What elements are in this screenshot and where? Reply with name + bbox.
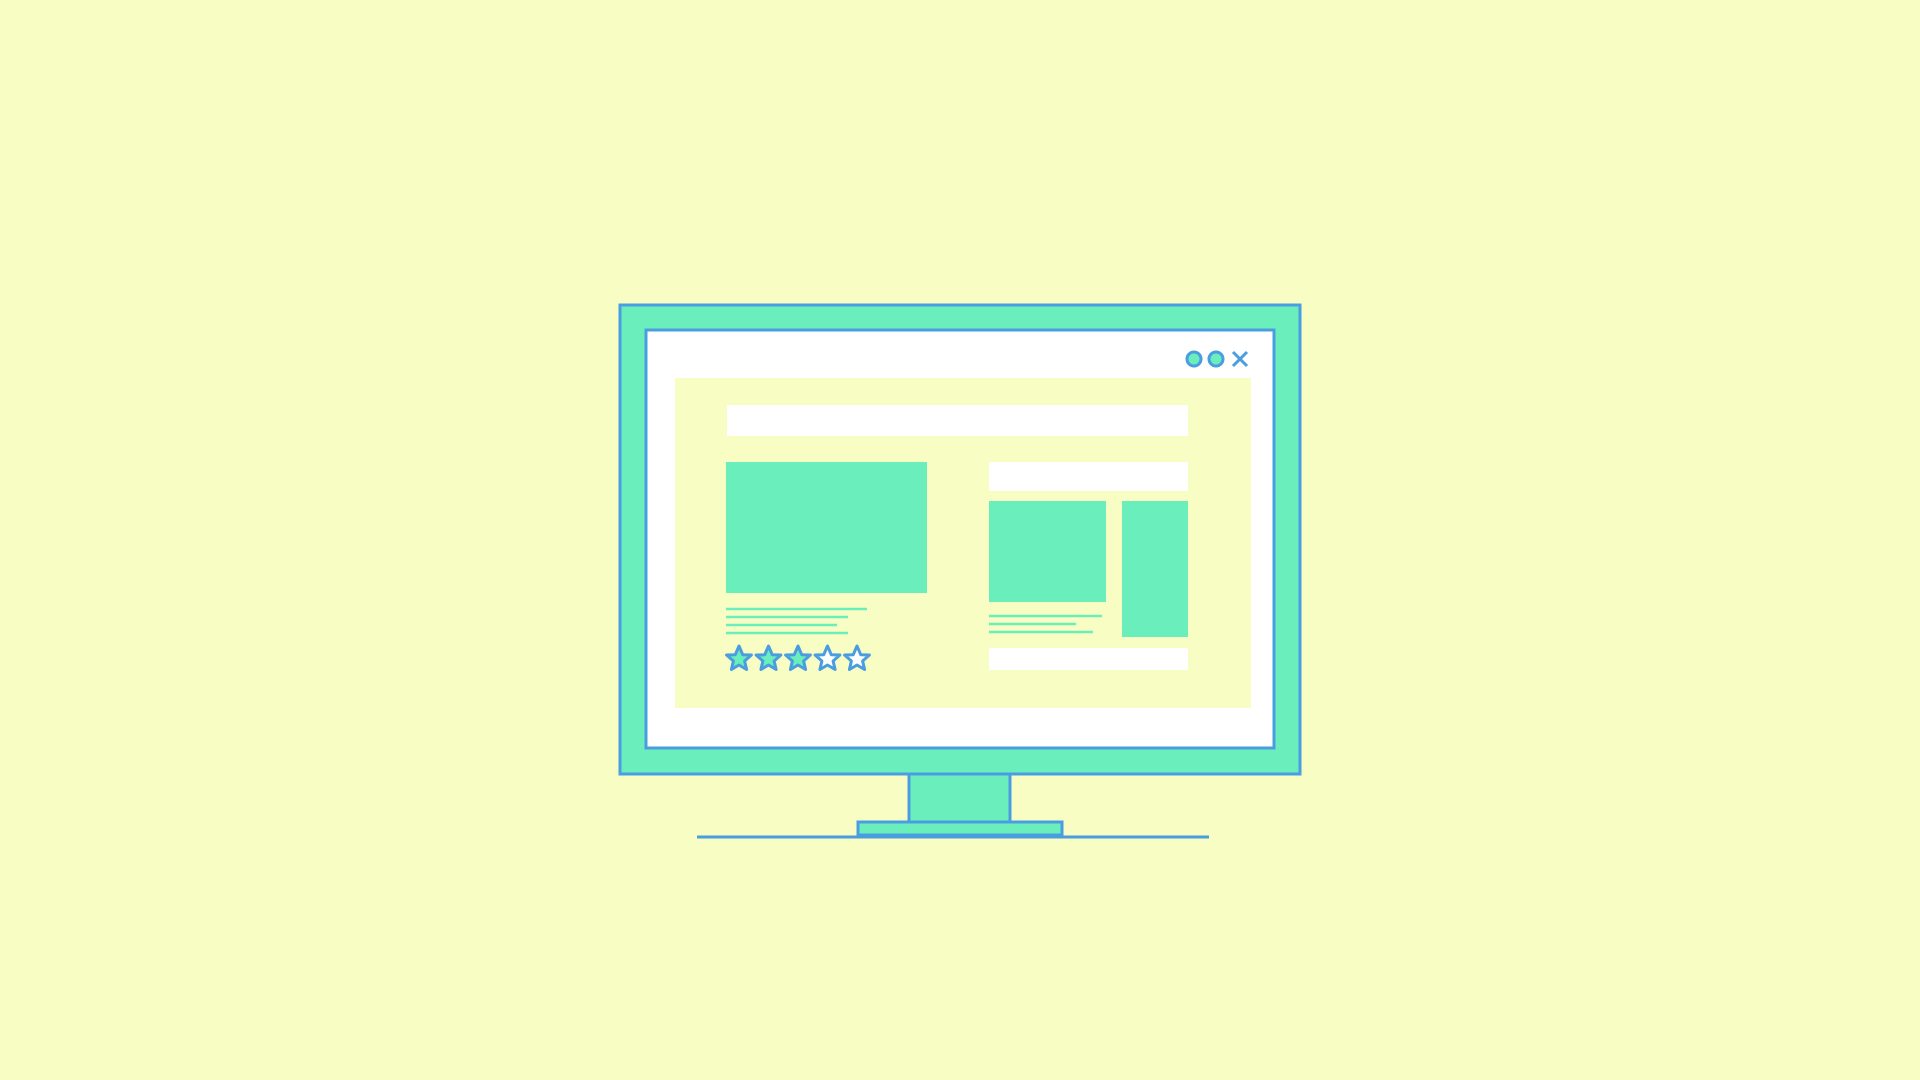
floor line bbox=[697, 836, 1209, 838]
right column header bar bbox=[989, 462, 1188, 491]
main image block bbox=[726, 462, 927, 593]
screen bbox=[646, 330, 1274, 748]
monitor bbox=[620, 305, 1300, 837]
right tall image bbox=[1122, 501, 1188, 637]
right square image bbox=[989, 501, 1106, 602]
monitor stand base bbox=[858, 822, 1062, 835]
web page content area bbox=[675, 378, 1251, 708]
monitor bezel bbox=[620, 305, 1300, 774]
text lines right bbox=[989, 616, 1102, 632]
header bar bbox=[727, 405, 1188, 436]
right bottom bar bbox=[989, 648, 1188, 670]
monitor stand neck bbox=[909, 774, 1010, 822]
window controls bbox=[1187, 352, 1247, 366]
text lines left bbox=[726, 609, 867, 633]
star rating bbox=[727, 646, 869, 670]
